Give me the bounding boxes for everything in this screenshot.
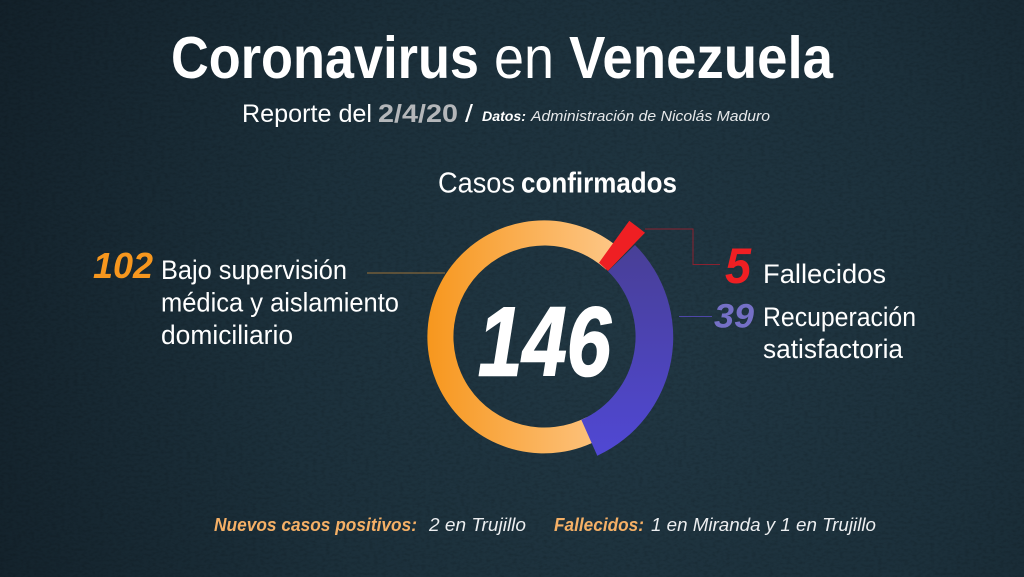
callout: 102 under supervision: 102 bbox=[93, 245, 153, 286]
title bbox=[171, 25, 834, 91]
callout: 5 deceased: 5 bbox=[725, 238, 752, 294]
callout: 39 recovered: satisfactoria bbox=[763, 334, 904, 364]
subtitle: report date and source: Reporte del bbox=[242, 100, 372, 128]
callout: 39 recovered: Recuperación bbox=[763, 302, 916, 332]
callout: 39 recovered: 39 bbox=[714, 298, 754, 336]
callout: 102 under supervision bbox=[93, 245, 445, 350]
subtitle: report date and source: 2/4/20 bbox=[378, 100, 458, 128]
title: Coronavirus bbox=[171, 25, 479, 91]
callout: 102 under supervision: médica y aislamiento bbox=[161, 288, 399, 318]
chart heading bbox=[438, 168, 677, 200]
chart heading: Casos bbox=[438, 168, 515, 200]
footer note: new cases and deaths: Fallecidos: bbox=[554, 515, 644, 535]
callout: 102 under supervision: domiciliario bbox=[161, 320, 293, 350]
subtitle: report date and source: / bbox=[465, 100, 473, 128]
footer note: new cases and deaths: 1 en Miranda y 1 en Trujillo bbox=[651, 515, 876, 535]
callout: 5 deceased: Fallecidos bbox=[763, 259, 886, 289]
subtitle: report date and source: Datos: bbox=[482, 108, 526, 124]
title: Venezuela bbox=[569, 25, 834, 91]
segment: red, deceased cases bbox=[599, 221, 645, 271]
segment: orange, supervised cases bbox=[427, 220, 622, 453]
footer note: new cases and deaths: 2 en Trujillo bbox=[428, 515, 526, 535]
donut chart bbox=[427, 220, 673, 456]
subtitle: report date and source: Administración de Nicolás Maduro bbox=[530, 109, 770, 125]
chart heading: confirmados bbox=[521, 168, 677, 200]
footer note: new cases and deaths bbox=[214, 515, 876, 535]
footer note: new cases and deaths: Nuevos casos positivos: bbox=[214, 515, 417, 535]
callout: 5 deceased bbox=[645, 229, 886, 294]
title: en bbox=[494, 25, 554, 91]
subtitle: report date and source bbox=[242, 100, 770, 128]
segment: blue, recovered cases bbox=[581, 245, 673, 456]
callout: 102 under supervision: Bajo supervisión bbox=[161, 255, 347, 285]
total number: 146 bbox=[478, 286, 612, 396]
callout: 39 recovered bbox=[679, 298, 916, 364]
